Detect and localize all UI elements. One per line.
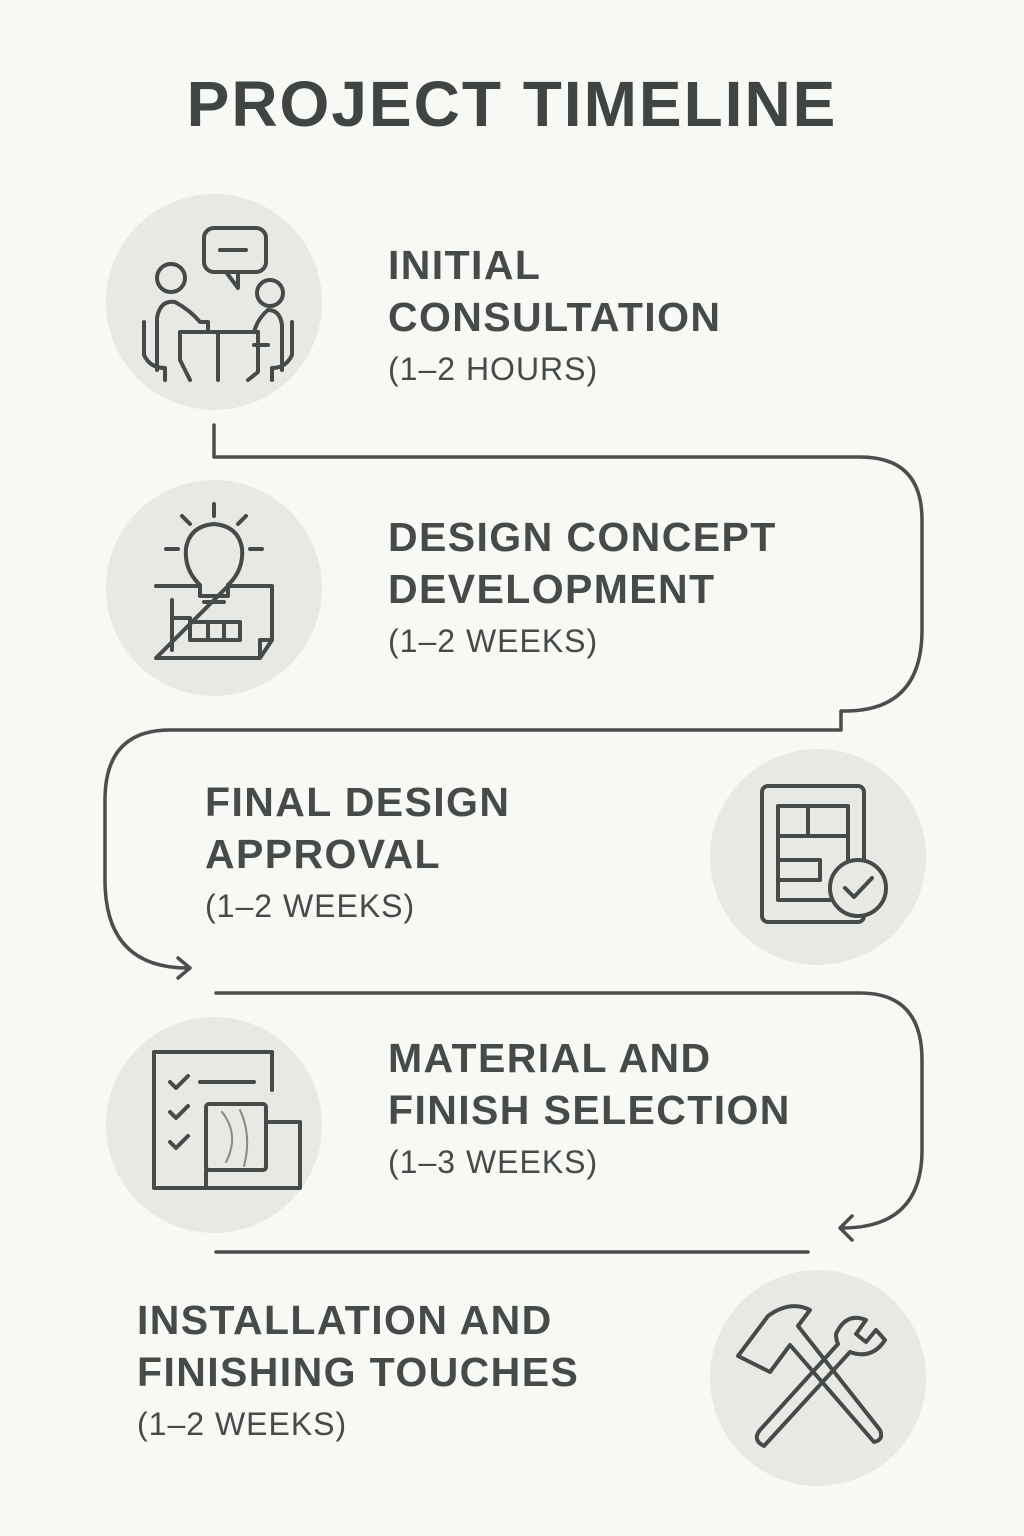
step 5 text (137, 1297, 579, 1442)
step 3 text (205, 779, 510, 924)
step 3 text: FINAL DESIGN (205, 779, 510, 825)
circle 1: consultation icon (106, 194, 322, 410)
step 5 text: FINISHING TOUCHES (137, 1349, 579, 1395)
step 5 text: INSTALLATION AND (137, 1297, 553, 1343)
step 1 text: (1–2 HOURS) (388, 351, 598, 387)
step 1 text: CONSULTATION (388, 294, 721, 340)
step 4 text (388, 1035, 791, 1180)
step 3 text: APPROVAL (205, 831, 441, 877)
step 1 text (388, 242, 721, 387)
step 4 text: MATERIAL AND (388, 1035, 712, 1081)
title: PROJECT TIMELINE (187, 68, 837, 140)
step 2 text (388, 514, 777, 659)
step 2 text: DEVELOPMENT (388, 566, 716, 612)
circle 5: tools icon (710, 1270, 926, 1486)
step 4 text: FINISH SELECTION (388, 1087, 791, 1133)
step 4 text: (1–3 WEEKS) (388, 1144, 598, 1180)
step 1 text: INITIAL (388, 242, 541, 288)
circle 2: design icon (106, 480, 322, 696)
step 5 text: (1–2 WEEKS) (137, 1406, 347, 1442)
circle 4: materials icon (106, 1017, 322, 1233)
step 2 text: DESIGN CONCEPT (388, 514, 777, 560)
step 3 text: (1–2 WEEKS) (205, 888, 415, 924)
circle 3: approval icon (710, 749, 926, 965)
step 2 text: (1–2 WEEKS) (388, 623, 598, 659)
